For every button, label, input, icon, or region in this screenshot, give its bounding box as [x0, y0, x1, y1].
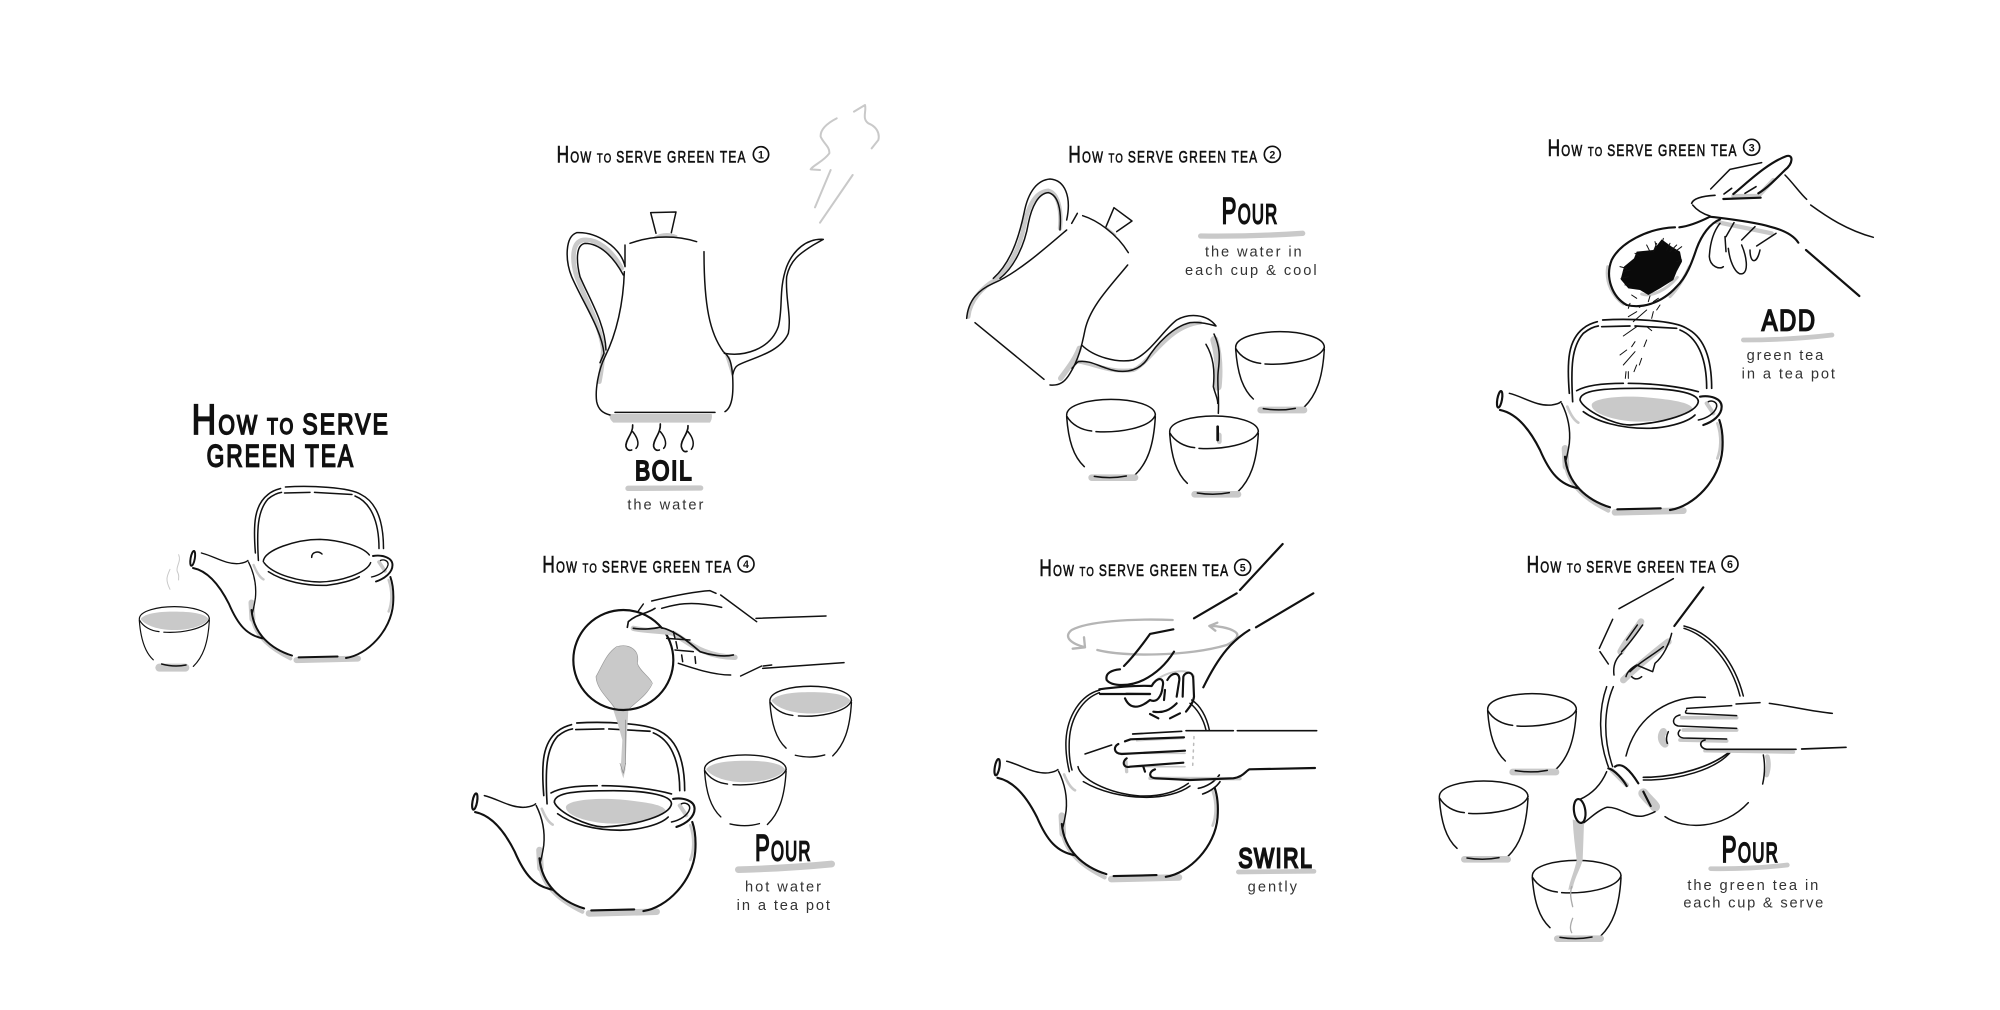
- panel: introduction: [139, 396, 393, 668]
- icon: kettle: [567, 212, 823, 423]
- teacup back: [1236, 332, 1324, 410]
- step heading: HOW TO SERVE GREEN TEA: [1039, 555, 1229, 582]
- heading: swirl: SWIRL: [1238, 843, 1313, 874]
- tea leaves: [1620, 238, 1682, 378]
- tilted teapot: [1572, 626, 1768, 825]
- caption: [737, 880, 830, 914]
- step number: [1235, 559, 1251, 575]
- title second line: GREEN TEA: [207, 439, 355, 474]
- step number: 1: [758, 149, 764, 161]
- cup shadow: [159, 656, 185, 680]
- teacup left: [1067, 399, 1155, 478]
- step number: [1744, 139, 1760, 155]
- caption: [1742, 348, 1835, 382]
- underline: [1201, 233, 1303, 236]
- panel: step 3 add tea: [1496, 135, 1873, 512]
- filled cup left: [705, 755, 786, 826]
- heading: add: ADD: [1762, 305, 1817, 338]
- title: HOW TO SERVE: [192, 396, 390, 444]
- teacup with tea: [139, 607, 209, 667]
- water stream: [613, 710, 628, 778]
- teapot lid: [263, 539, 371, 585]
- underline: [1743, 335, 1832, 340]
- panel: step 5 swirl: [993, 544, 1317, 896]
- step number: 6: [1727, 559, 1733, 571]
- underline: [738, 864, 832, 870]
- heading: boil: BOIL: [635, 455, 693, 486]
- underline: [628, 480, 701, 496]
- panel: step 1 boil: [557, 105, 879, 513]
- step number: 4: [743, 559, 749, 571]
- caption: [1185, 245, 1317, 279]
- icon: tilted kettle: [967, 179, 1216, 385]
- step number: 5: [1240, 562, 1246, 574]
- step heading: HOW TO SERVE GREEN TEA: [542, 552, 732, 579]
- caption: in a tea pot: [737, 898, 830, 914]
- step heading: HOW TO SERVE GREEN TEA: [557, 142, 747, 169]
- lower hand: [1662, 703, 1846, 752]
- step number: 3: [1749, 142, 1755, 154]
- panel: step 4 pour hot water: [471, 552, 851, 914]
- caption: gently: [1248, 880, 1298, 896]
- teapot with lid: [189, 486, 393, 660]
- caption: the green tea in: [1687, 878, 1818, 894]
- step number: 2: [1269, 149, 1275, 161]
- step number: [1722, 556, 1738, 572]
- cup back: [1488, 694, 1576, 772]
- step heading: HOW TO SERVE GREEN TEA: [1068, 142, 1258, 169]
- caption: [1683, 878, 1823, 912]
- underline: [1238, 864, 1314, 879]
- icon: flames: [626, 424, 693, 452]
- underline: [1711, 865, 1787, 869]
- filled cup right: [770, 686, 851, 757]
- water stream: [1206, 334, 1219, 442]
- hot water bowl: [573, 610, 673, 710]
- step heading: HOW TO SERVE GREEN TEA: [1527, 552, 1717, 579]
- teacup center: [1170, 416, 1258, 494]
- cup left: [1439, 781, 1528, 859]
- hand: [627, 591, 844, 676]
- hand: [1692, 156, 1873, 296]
- cup foot line: [162, 664, 186, 666]
- caption: in a tea pot: [1742, 366, 1835, 382]
- caption: hot water: [745, 880, 821, 896]
- caption: the water: [627, 497, 703, 513]
- caption: the water in: [1205, 245, 1302, 261]
- tea stream: [1568, 819, 1584, 933]
- swirl arrow: [1068, 620, 1237, 655]
- lower hand and arm: [1115, 731, 1317, 780]
- spoon: [1607, 180, 1773, 306]
- heading: pour: POUR: [755, 827, 812, 869]
- step number: [1264, 146, 1280, 162]
- panel: step 6 pour and serve: [1439, 552, 1846, 939]
- cup front: [1532, 860, 1621, 939]
- heading: pour: POUR: [1222, 189, 1278, 231]
- caption: each cup & serve: [1683, 896, 1823, 912]
- caption: green tea: [1747, 348, 1824, 364]
- caption: each cup & cool: [1185, 263, 1317, 279]
- upper arm and hand: [1099, 544, 1313, 718]
- step heading: HOW TO SERVE GREEN TEA: [1548, 135, 1738, 162]
- steam: [167, 555, 179, 589]
- upper hand: [1599, 579, 1703, 680]
- step number: [738, 556, 754, 572]
- panel: step 2 pour water: [967, 142, 1324, 494]
- teapot body: [993, 759, 1218, 879]
- heading: pour: POUR: [1722, 828, 1779, 870]
- teapot handle and lid: [1066, 690, 1220, 797]
- teapot: [1496, 319, 1723, 512]
- step number: [753, 147, 769, 162]
- icon: steam: [811, 105, 879, 223]
- teapot: [471, 722, 696, 913]
